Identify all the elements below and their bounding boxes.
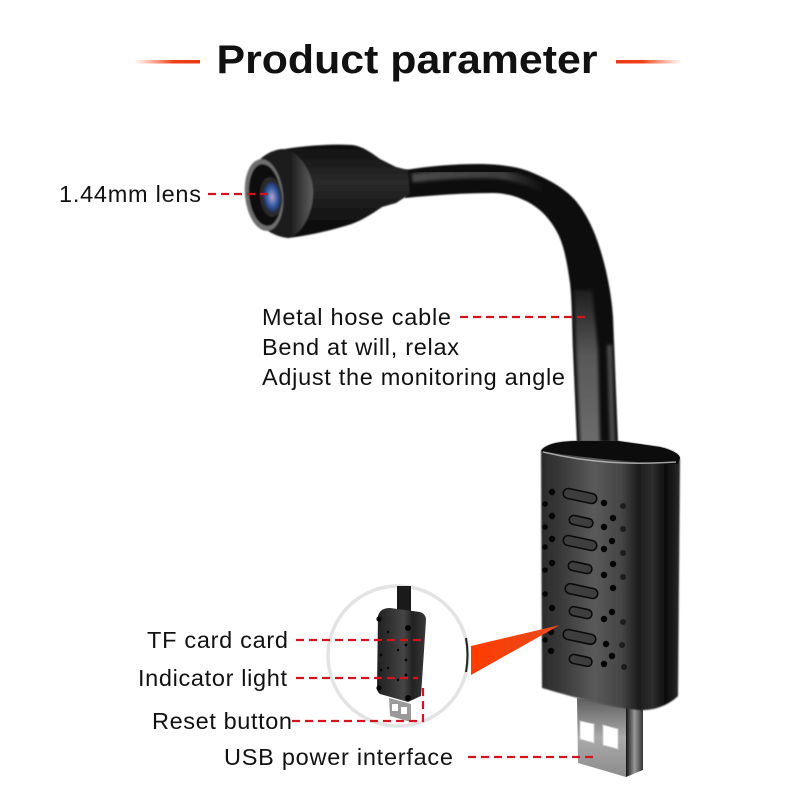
usb camera body — [541, 441, 680, 777]
inset usb plug — [389, 698, 411, 722]
label: hose cable description: Adjust the monitoring angle — [262, 364, 565, 390]
label: reset button: Reset button — [152, 708, 292, 734]
icon: lens glass — [262, 181, 282, 213]
title: Product parameter — [216, 38, 598, 82]
flexible metal hose cable — [405, 164, 618, 443]
red dashed leader lines — [208, 194, 595, 757]
title — [134, 38, 682, 82]
ventilation dots — [542, 489, 627, 670]
label: indicator light: Indicator light — [138, 665, 287, 691]
usb plug — [577, 698, 643, 777]
label: TF card: TF card card — [147, 627, 288, 653]
ventilation slots — [562, 488, 599, 667]
inset device body — [377, 608, 426, 702]
label: hose cable description: Metal hose cable — [262, 304, 451, 330]
label: hose cable description — [262, 304, 565, 390]
label: hose cable description: Bend at will, relax — [262, 334, 459, 360]
orange callout pointer — [471, 625, 560, 675]
label: lens: 1.44mm lens — [59, 181, 201, 207]
housing — [541, 441, 680, 710]
magnifier circle — [328, 586, 468, 726]
inset cable — [397, 586, 411, 616]
label: usb power interface: USB power interface — [224, 744, 453, 770]
camera head with lens — [241, 145, 410, 238]
